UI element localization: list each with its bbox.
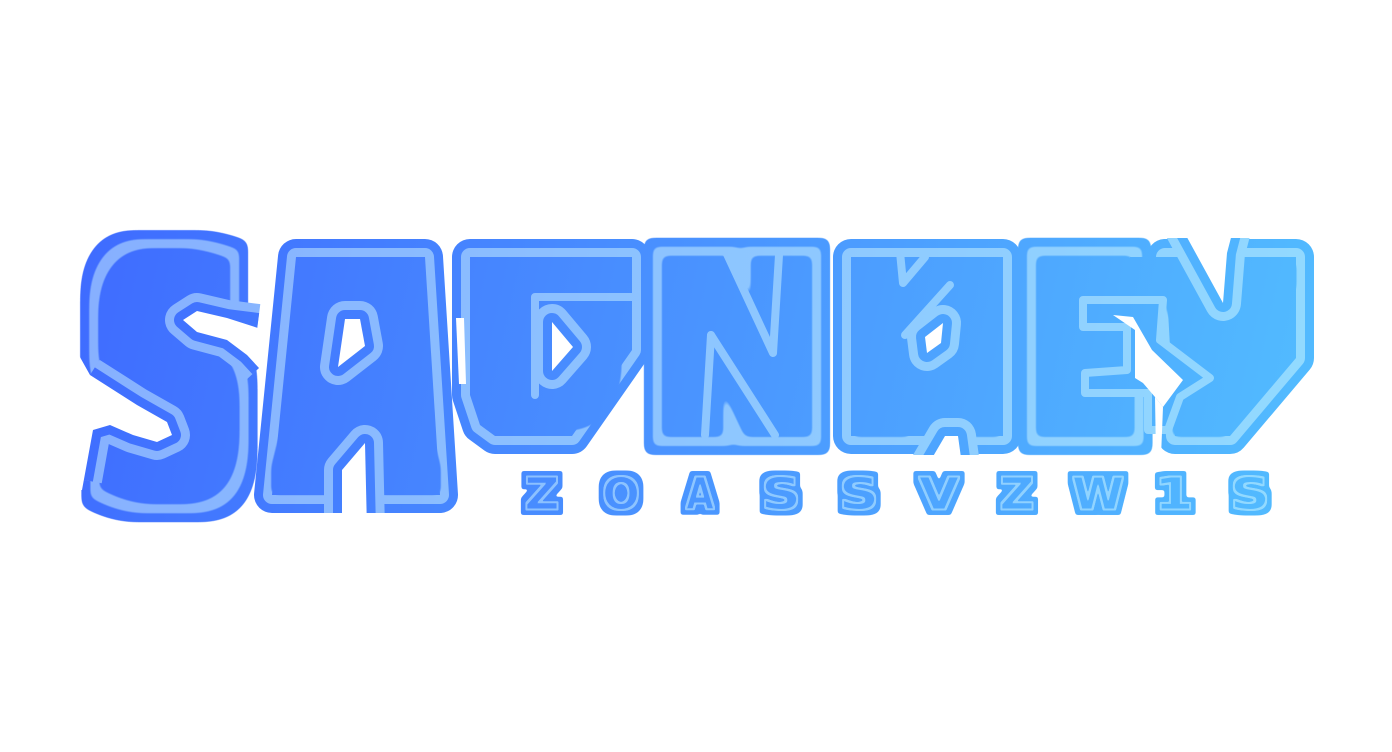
digit 1: 1	[1155, 469, 1193, 519]
letter S: S	[98, 207, 240, 558]
letter W: W	[1072, 469, 1124, 520]
letter D: D	[490, 240, 616, 464]
letter D	[456, 240, 636, 464]
letter Y	[1083, 230, 1296, 472]
letter A: A	[686, 470, 714, 520]
letter V: V	[919, 470, 959, 520]
letter E: E	[1037, 228, 1131, 473]
letter O: O	[602, 470, 640, 520]
letter S: S	[1230, 469, 1270, 520]
letter S: S	[761, 469, 801, 520]
letter A second: A	[865, 242, 989, 470]
letter N: N	[659, 228, 815, 473]
letter A: A	[284, 222, 428, 547]
letter Z: Z	[1000, 469, 1034, 519]
letter Z: Z	[525, 469, 559, 519]
wordmark: SADNAEY	[80, 230, 1314, 522]
letter S: S	[839, 469, 879, 520]
letter S	[45, 207, 275, 558]
sub-line lettering	[525, 469, 1270, 520]
letter Y: Y	[1136, 235, 1291, 472]
